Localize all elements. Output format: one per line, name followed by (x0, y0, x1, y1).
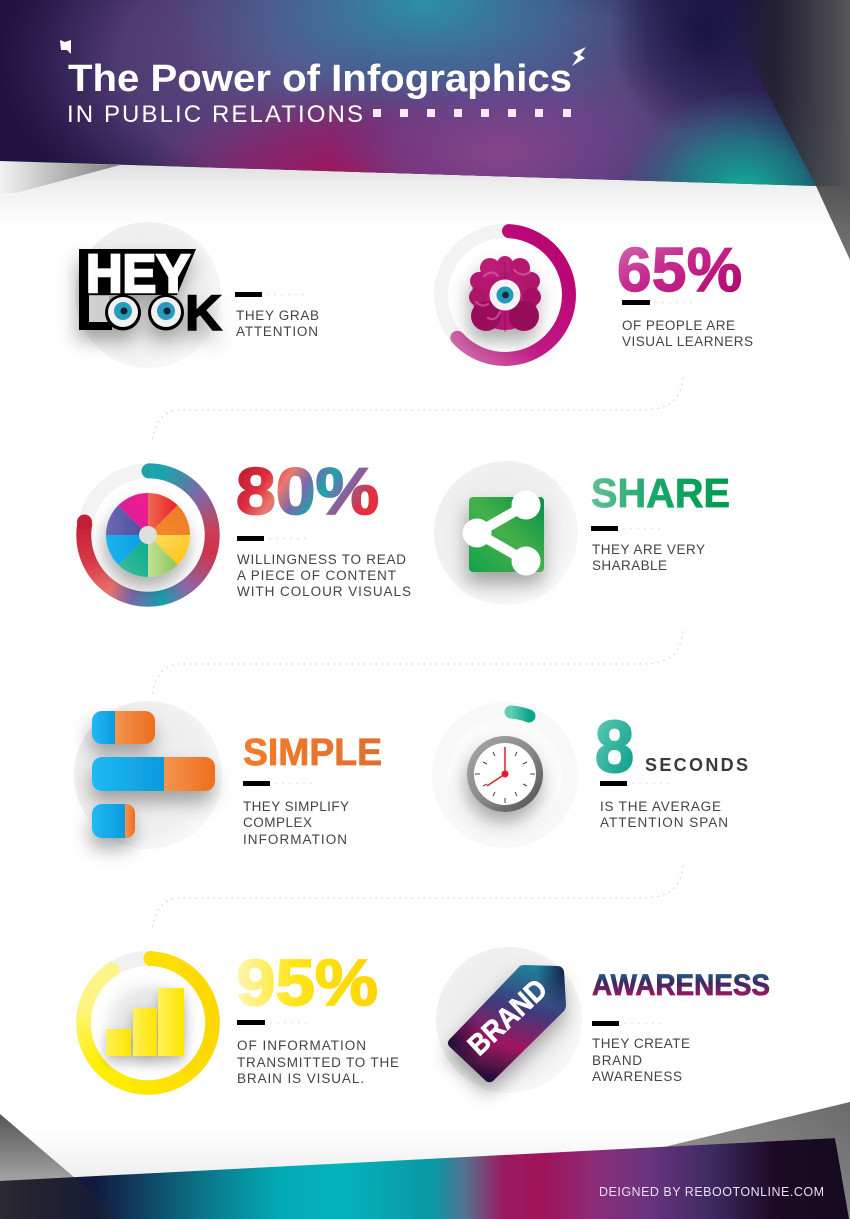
big number: 95% (236, 946, 378, 1019)
caption: IS THE AVERAGE (600, 799, 721, 814)
panel: 95% visual (76, 946, 399, 1095)
caption: THEY GRAB (236, 308, 319, 323)
panel: brand awareness (436, 947, 770, 1100)
title: The Power of Infographics (68, 58, 572, 100)
divider (622, 300, 692, 305)
icon: brain with eye (469, 256, 541, 332)
grey corner wedge: bottom right (664, 1102, 850, 1219)
big number: 65% (617, 236, 742, 305)
caption: TRANSMITTED TO THE (237, 1055, 399, 1070)
progress ring (432, 702, 578, 848)
footer banner (0, 1130, 850, 1219)
progress ring (76, 463, 220, 607)
caption (243, 799, 349, 847)
divider (237, 536, 306, 541)
panel: 65% visual learners (441, 231, 753, 359)
icon: left lightning spark (60, 40, 71, 54)
caption: ATTENTION (236, 324, 318, 339)
caption: BRAND (592, 1053, 642, 1068)
divider (592, 1021, 661, 1026)
caption: VISUAL LEARNERS (622, 334, 753, 349)
divider (243, 781, 312, 786)
icon: colour wheel (106, 493, 190, 577)
caption: SHARABLE (592, 558, 667, 573)
caption: WITH COLOUR VISUALS (237, 584, 411, 599)
caption (622, 318, 753, 349)
icon: stacked bars (74, 701, 222, 849)
icon: right lightning spark (572, 47, 586, 66)
caption: OF PEOPLE ARE (622, 318, 735, 333)
caption: AWARENESS (592, 1069, 682, 1084)
caption (592, 542, 705, 573)
caption: ATTENTION SPAN (600, 815, 728, 830)
grey corner wedge: top left (0, 161, 120, 193)
divider (591, 526, 660, 531)
big number: 80% (236, 454, 379, 528)
big number: 8 (595, 707, 634, 788)
caption: COMPLEX (243, 815, 312, 830)
heading: SECONDS (645, 755, 748, 775)
caption: A PIECE OF CONTENT (237, 568, 396, 583)
progress ring (441, 231, 569, 359)
divider (235, 292, 304, 297)
grey corner wedge: bottom left (0, 1114, 75, 1182)
panel: share (434, 461, 730, 605)
caption (237, 552, 411, 599)
heading: AWARENESS (592, 969, 770, 1002)
caption: THEY CREATE (592, 1036, 690, 1051)
caption (237, 1038, 399, 1086)
caption: THEY ARE VERY (592, 542, 705, 557)
dotted connector 2 (152, 632, 683, 696)
grey corner wedge: top right (816, 186, 850, 260)
panel: 80% colour visuals (76, 454, 411, 607)
icon: brand tag (436, 947, 582, 1100)
caption (592, 1036, 690, 1084)
icon: hey look: K (185, 285, 222, 341)
dotted connector 1 (152, 378, 683, 442)
header banner (0, 0, 850, 186)
icon: clock (467, 736, 543, 812)
caption: WILLINGNESS TO READ (237, 552, 406, 567)
icon: share symbol (434, 461, 578, 605)
divider (600, 781, 669, 786)
caption: OF INFORMATION (237, 1038, 366, 1053)
icon: bar chart (106, 988, 184, 1056)
heading: SHARE (591, 470, 730, 516)
progress ring (76, 951, 220, 1095)
heading: SIMPLE (243, 732, 382, 774)
caption: THEY SIMPLIFY (243, 799, 349, 814)
panel: 8 seconds (432, 702, 748, 848)
panel: simple (74, 701, 382, 849)
icon: hey look: HEY (86, 244, 190, 304)
dotted connector 3 (152, 866, 683, 930)
panel: they grab attention (75, 222, 319, 368)
caption: BRAIN IS VISUAL. (237, 1071, 364, 1086)
icon: hey look (75, 222, 222, 368)
divider (237, 1020, 307, 1025)
footer credit: DEIGNED BY REBOOTONLINE.COM (599, 1185, 824, 1199)
caption (236, 308, 319, 339)
icon: brand tag: BRAND (462, 973, 554, 1062)
subtitle: IN PUBLIC RELATIONS (67, 101, 363, 128)
square dots row (373, 109, 571, 117)
caption: INFORMATION (243, 832, 347, 847)
caption (600, 799, 728, 830)
